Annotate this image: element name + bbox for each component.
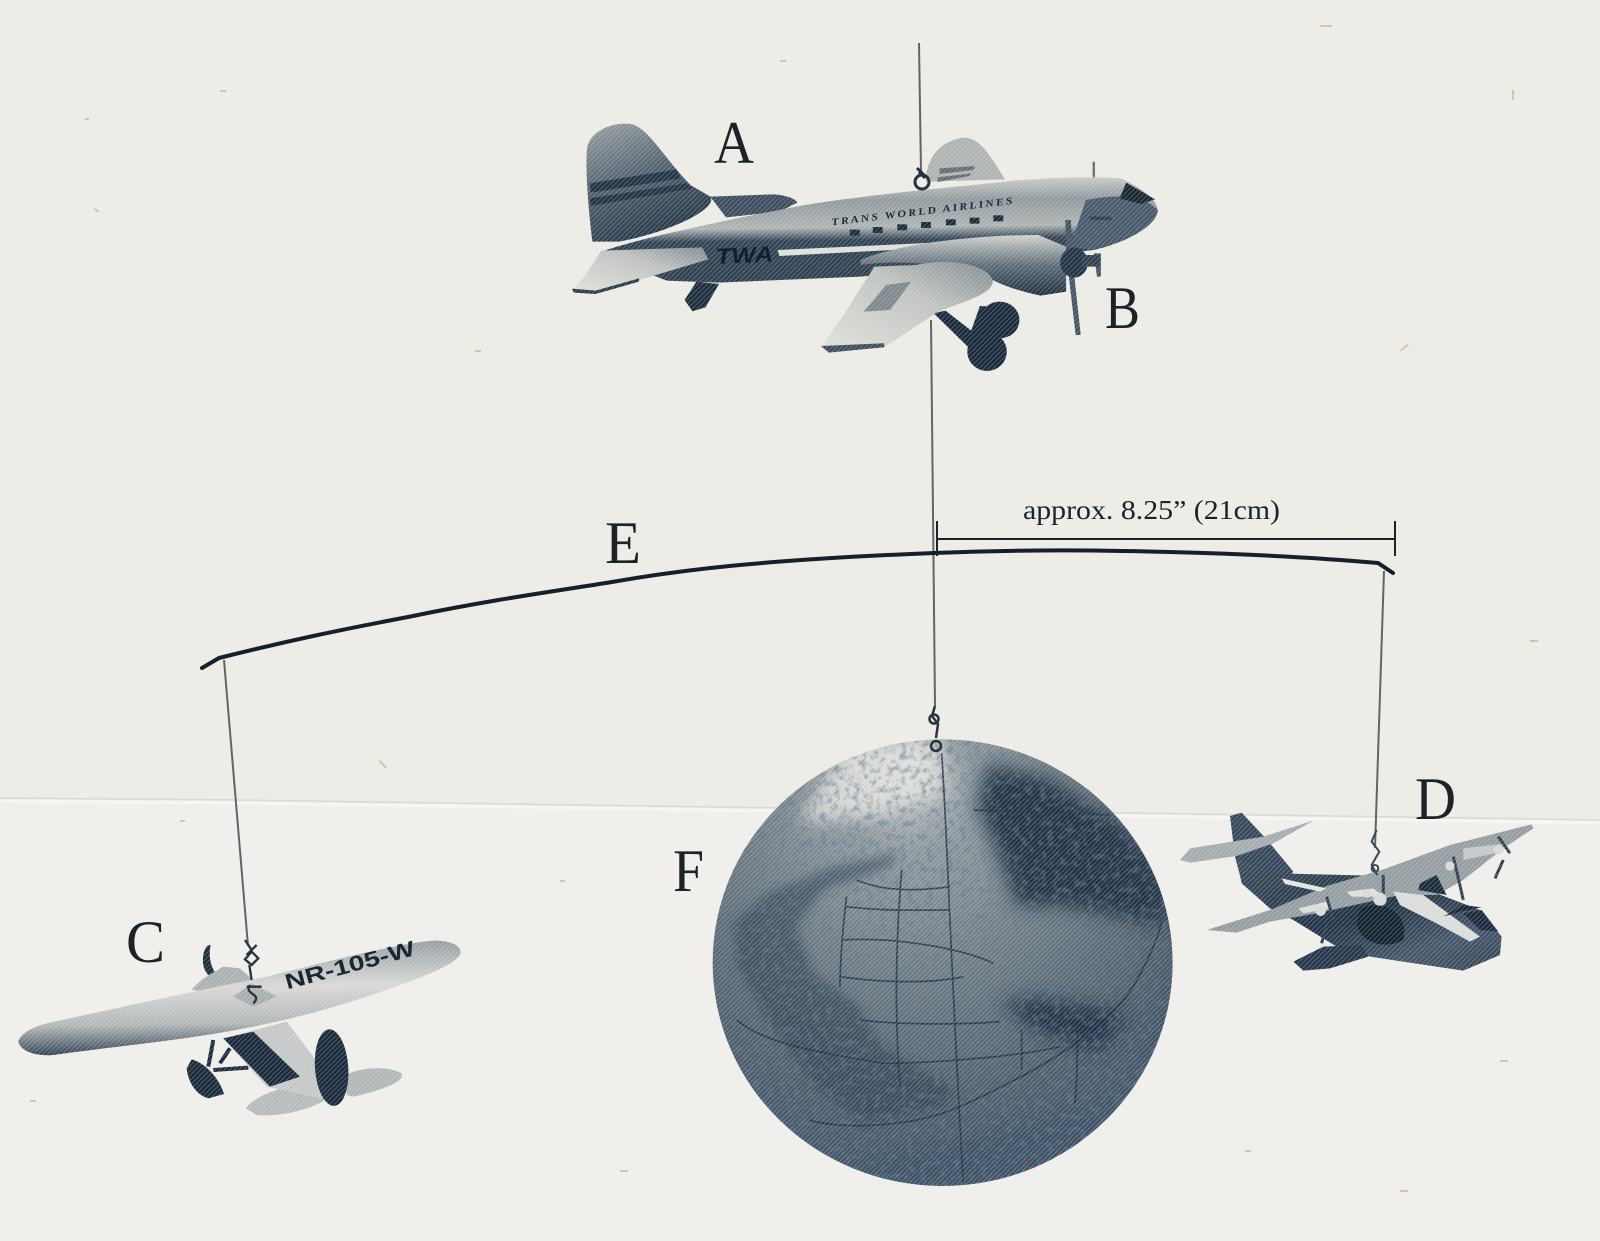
hook C <box>245 940 262 1003</box>
airliner markings: TWA <box>715 242 774 269</box>
hook: globe <box>930 706 938 738</box>
airliner markings <box>715 196 1013 269</box>
plane C: monoplane NR-105-W <box>18 936 461 1115</box>
plane A and B: TWA airliner <box>572 124 1158 371</box>
hook ring: plane A <box>915 168 929 189</box>
plane D: flying boat <box>1180 813 1533 971</box>
globe F <box>712 739 1173 1186</box>
label D: D <box>1415 766 1456 832</box>
arm E: balance rod <box>202 550 1393 668</box>
hanging string: top <box>919 43 921 172</box>
dimension bracket <box>937 521 1395 556</box>
label B: B <box>1105 275 1140 341</box>
label E: E <box>605 510 641 576</box>
label F: F <box>673 838 704 904</box>
hanging string: plane to globe <box>931 320 935 706</box>
label C: C <box>126 909 165 975</box>
flying boat body <box>1180 813 1533 971</box>
label A: A <box>714 110 754 176</box>
globe ring <box>931 741 941 751</box>
airliner markings: TRANS WORLD AIRLINES <box>831 196 1013 228</box>
hook D <box>1372 830 1379 875</box>
dimension label: approx. 8.25” (21cm) <box>1023 495 1280 525</box>
airliner body shapes <box>572 124 1158 371</box>
wing registration: NR-105-W <box>282 936 418 994</box>
monoplane body <box>18 941 461 1115</box>
hanging string: right arm to plane D <box>1375 571 1384 848</box>
hanging string: left arm to plane C <box>224 660 248 946</box>
